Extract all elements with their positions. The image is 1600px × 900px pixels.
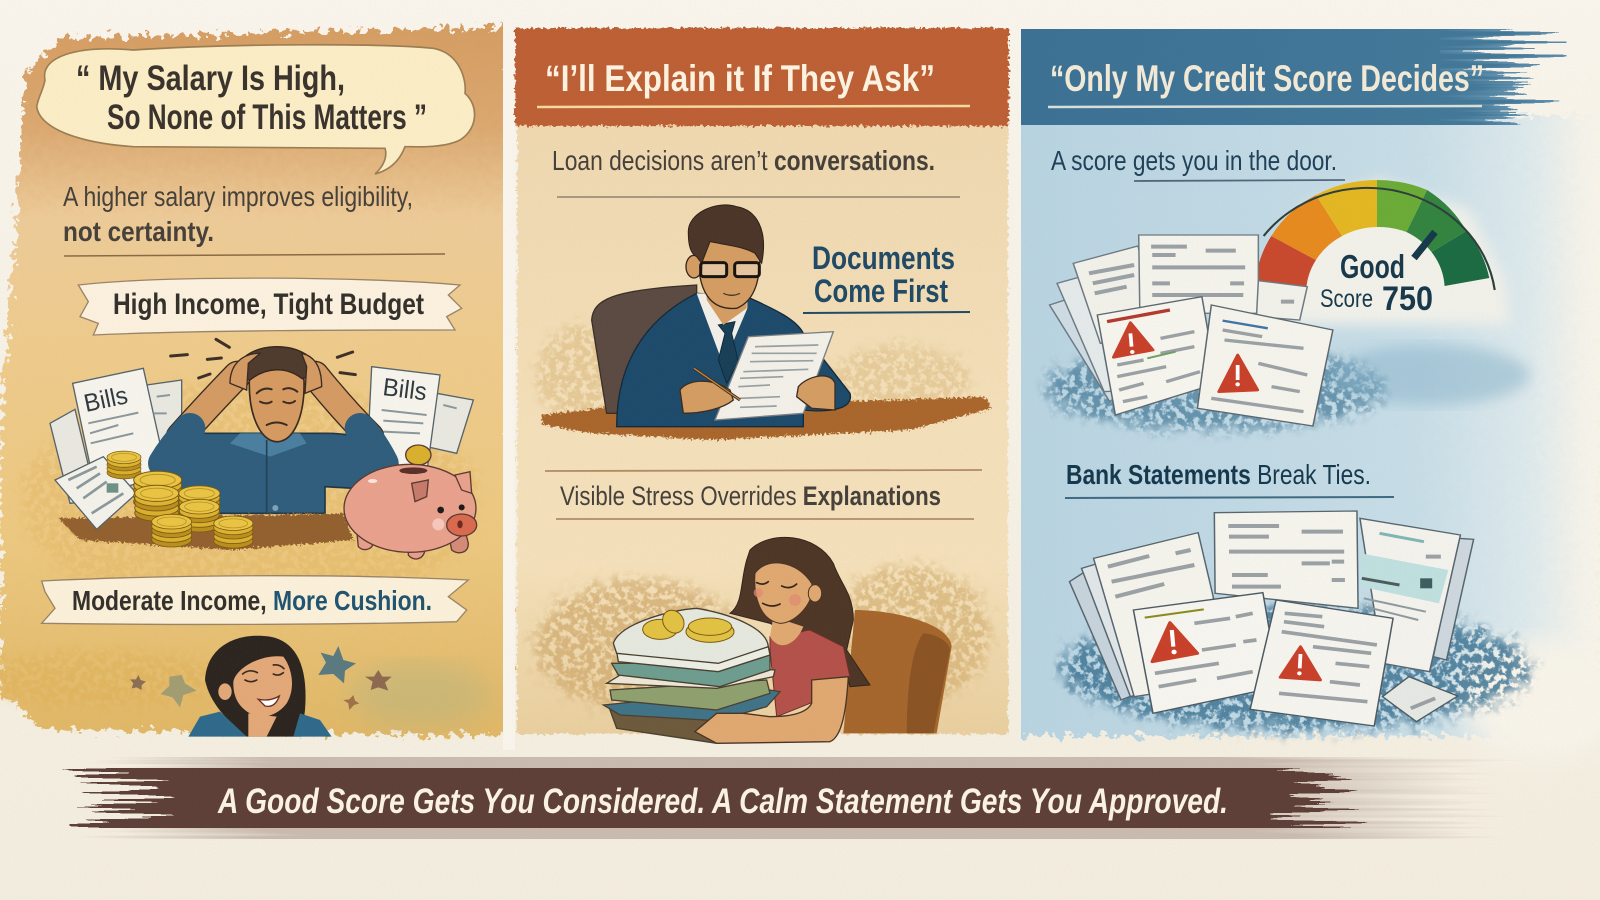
label: bills left: Bills [81,381,130,418]
book stack [603,608,780,743]
speech bubble [37,45,475,174]
label: bills right: Bills [381,373,428,406]
gauge [1255,180,1510,325]
icon: warning triangle [1280,647,1320,680]
heading band [515,28,1009,126]
illustration: stressed man with bills, coins and piggy bank [50,339,477,559]
heading: salary myth [76,59,427,137]
text: salary description: A higher salary improves eligibility, [63,181,413,212]
small paper on desk [55,457,137,529]
text: salary description: not certainty. [63,216,214,247]
table [58,513,353,550]
heading: explain myth: “I’ll Explain it If They Ask” [545,58,935,99]
heading: salary myth: “ My Salary Is High, [76,59,345,98]
documents with warnings bottom [1069,511,1474,726]
ribbon: high income: High Income, Tight Budget [113,288,424,321]
callout: documents come first [803,240,970,313]
chair [592,285,697,413]
illustration: officer reading document [542,205,992,440]
piggy bank [344,445,477,559]
gauge label [1320,248,1433,318]
icon: warning triangle [1152,623,1197,662]
bills papers right [367,367,473,473]
heading: salary myth: So None of This Matters ” [107,98,427,137]
takeaway banner [100,757,1470,839]
takeaway text: A Good Score Gets You Considered. A Calm Statement Gets You Approved. [217,782,1228,821]
desk [542,397,992,440]
icon: stars [130,646,392,710]
bills papers left [50,368,182,503]
text: salary description [63,181,413,247]
gauge label: Good [1340,248,1405,285]
coins [643,606,734,642]
documents with warnings top [1050,235,1333,426]
chair [843,610,952,733]
callout: documents come first: Documents [812,240,955,276]
coin stacks [107,451,253,548]
ribbon: moderate income [42,576,468,624]
text: visible stress: Visible Stress Overrides Explanations [560,481,941,511]
panel: explain myth [515,28,1009,743]
icon: warning triangle [1113,323,1153,357]
ribbon: moderate income: Moderate Income, More Cushion. [72,585,432,616]
gauge label: Score [1320,285,1373,313]
text: bank statements: Bank Statements Break Ties. [1066,459,1371,490]
heading band [1000,29,1515,125]
illustration: calm woman with stars [130,636,392,737]
ribbon: high income [78,278,462,335]
text: score door: A score gets you in the door. [1051,145,1337,176]
illustration: calm woman with book stack [603,537,952,743]
panel: credit score myth [1000,29,1600,760]
gauge label: 750 [1382,280,1433,318]
panel: salary myth [0,15,515,750]
heading: credit score myth: “Only My Credit Score Decides” [1050,58,1484,99]
callout: documents come first: Come First [814,273,948,309]
text: loan decisions: Loan decisions aren’t conversations. [552,145,935,176]
icon: stress marks [171,339,355,378]
icon: warning triangle [1219,355,1258,392]
